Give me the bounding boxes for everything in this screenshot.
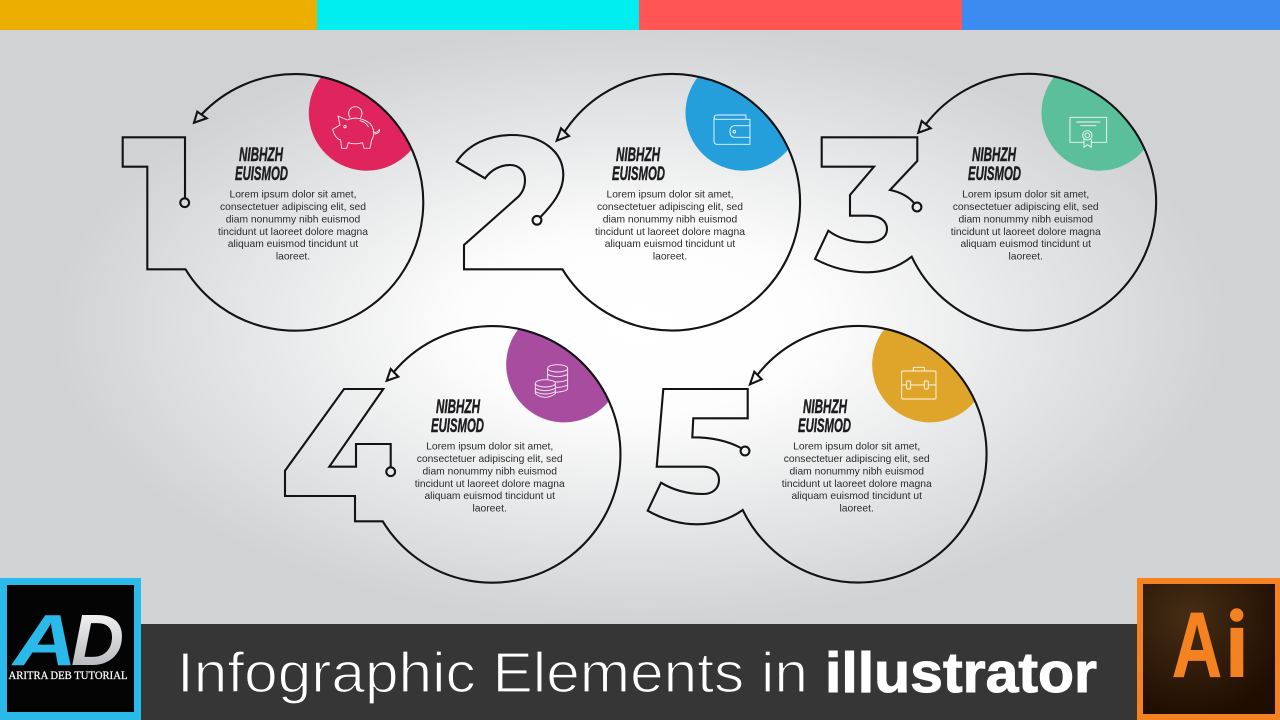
title: bold part: illustrator	[825, 641, 1097, 705]
body text: tincidunt ut laoreet dolore magna	[951, 227, 1101, 238]
body text: diam nonummy nibh euismod	[958, 214, 1093, 225]
logo: Aritra Deb Tutorial	[0, 578, 141, 720]
arrowhead	[750, 372, 762, 384]
body text: laoreet.	[276, 252, 310, 262]
heading: EUISMOD	[431, 416, 484, 437]
body text: diam nonummy nibh euismod	[422, 466, 557, 477]
heading: EUISMOD	[612, 164, 665, 185]
icon: coin stacks	[535, 365, 568, 397]
body text: Lorem ipsum dolor sit amet,	[229, 190, 357, 200]
body text: aliquam euismod tincidunt ut	[605, 239, 735, 250]
colour segment: gold	[872, 329, 976, 422]
letter i dot	[1230, 608, 1243, 622]
arrowhead	[918, 121, 931, 133]
body text: aliquam euismod tincidunt ut	[424, 491, 555, 502]
icon: piggy bank	[333, 107, 380, 148]
numeral end dot	[741, 447, 749, 455]
panel: step 3	[815, 74, 1156, 330]
numeral 3 and ring outline	[815, 74, 1156, 330]
body text: consectetuer adipiscing elit, sed	[953, 202, 1099, 213]
body text: laoreet.	[473, 504, 507, 514]
logo letter A: A	[1172, 593, 1222, 697]
letter i stem: i	[1224, 593, 1250, 697]
body text: diam nonummy nibh euismod	[603, 214, 738, 225]
icon: briefcase	[902, 367, 936, 399]
heading: EUISMOD	[235, 164, 288, 185]
numeral 4 and ring outline	[285, 326, 620, 583]
icon: wallet	[714, 115, 750, 144]
title bar	[141, 624, 1137, 720]
icon: certificate	[1070, 117, 1107, 147]
heading: NIBHZH	[616, 145, 661, 166]
numeral end dot	[386, 467, 395, 476]
panel: step 1	[123, 74, 423, 331]
body text: tincidunt ut laoreet dolore magna	[218, 227, 368, 238]
panel: step 2	[457, 74, 800, 331]
body text: laoreet.	[1009, 252, 1043, 262]
colour segment: purple	[506, 329, 610, 422]
body text: Lorem ipsum dolor sit amet,	[793, 442, 920, 452]
heading: NIBHZH	[972, 145, 1017, 166]
arrowhead	[387, 369, 398, 381]
panel: step 5	[648, 326, 987, 583]
numeral 1 and ring outline	[123, 74, 423, 331]
arrowhead	[194, 112, 207, 123]
body text: Lorem ipsum dolor sit amet,	[426, 442, 553, 452]
heading: NIBHZH	[803, 397, 848, 418]
logo letter A: A	[11, 601, 77, 681]
body text: aliquam euismod tincidunt ut	[960, 239, 1091, 250]
logo letter D: D	[71, 601, 124, 681]
numeral 2 and ring outline	[457, 74, 800, 331]
body text: aliquam euismod tincidunt ut	[228, 239, 358, 250]
title: light part: Infographic Elements in	[177, 641, 808, 705]
body text: diam nonummy nibh euismod	[226, 214, 361, 225]
top colour bands	[0, 0, 1280, 30]
logo caption: ARITRA DEB TUTORIAL	[8, 670, 128, 682]
logo letter i	[1230, 608, 1244, 677]
panel: step 4	[285, 326, 620, 583]
body text: tincidunt ut laoreet dolore magna	[415, 479, 565, 490]
arrowhead	[557, 128, 569, 141]
body text: consectetuer adipiscing elit, sed	[597, 202, 743, 213]
heading: NIBHZH	[436, 397, 481, 418]
body text: Lorem ipsum dolor sit amet,	[962, 190, 1089, 200]
body text: consectetuer adipiscing elit, sed	[417, 454, 563, 465]
body text: laoreet.	[840, 504, 874, 514]
body text: laoreet.	[653, 252, 687, 262]
numeral end dot	[180, 198, 189, 207]
numeral 5 and ring outline	[648, 326, 987, 583]
body text: tincidunt ut laoreet dolore magna	[782, 479, 932, 490]
colour segment: pink	[309, 77, 412, 171]
body text: Lorem ipsum dolor sit amet,	[606, 190, 734, 200]
heading: EUISMOD	[968, 164, 1021, 185]
body text: tincidunt ut laoreet dolore magna	[595, 227, 745, 238]
body text: consectetuer adipiscing elit, sed	[784, 454, 930, 465]
logo: Adobe Illustrator	[1137, 578, 1280, 720]
heading: NIBHZH	[239, 145, 284, 166]
numeral end dot	[533, 216, 541, 225]
body text: aliquam euismod tincidunt ut	[791, 491, 922, 502]
numeral end dot	[913, 203, 921, 211]
colour segment: blue	[685, 77, 789, 171]
heading: EUISMOD	[798, 416, 851, 437]
body text: diam nonummy nibh euismod	[789, 466, 924, 477]
colour segment: green	[1041, 77, 1145, 171]
body text: consectetuer adipiscing elit, sed	[220, 202, 366, 213]
